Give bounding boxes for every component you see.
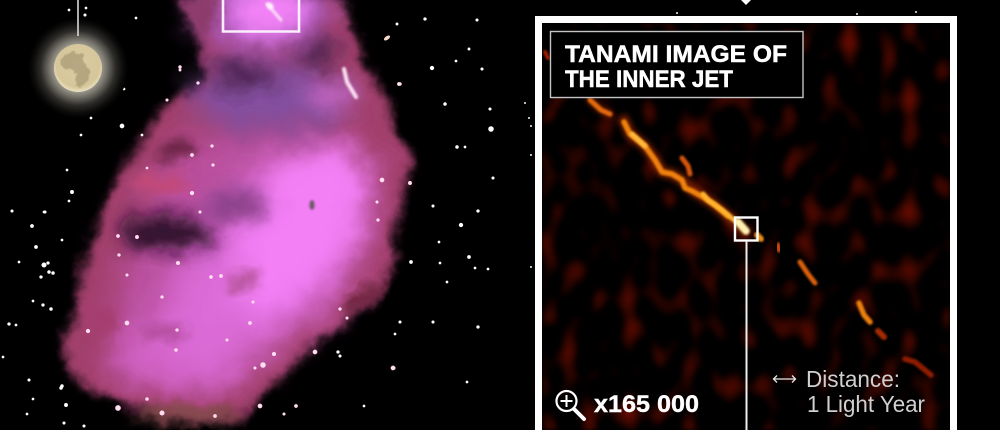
bright radio streak (344, 69, 356, 97)
zoom box on the lobe centre (223, 0, 299, 32)
connector arrowhead at top (741, 0, 751, 5)
white frame (538, 20, 954, 430)
pointer line to the moon (77, 0, 79, 36)
lower brown edge (136, 406, 240, 424)
distance label: 1 Light Year (807, 391, 925, 417)
moon for scale (28, 0, 128, 118)
small elongated source (383, 35, 391, 41)
title box (550, 32, 803, 98)
background noise (542, 23, 950, 430)
title box: THE INNER JET (565, 66, 733, 93)
upper purple bridge (192, 61, 348, 133)
stars over the nebula (86, 66, 412, 417)
radio lobe nebula (62, 0, 411, 424)
title box: TANAMI IMAGE OF (565, 41, 787, 68)
icon: distance arrow (774, 376, 796, 382)
central speck (309, 200, 315, 210)
top bright core (194, 0, 330, 51)
distance label: Distance: (806, 366, 900, 392)
icon: magnifier (556, 391, 584, 419)
dark patches (120, 215, 212, 251)
inner jet (545, 52, 931, 375)
distance label (806, 366, 925, 417)
panel: TANAMI image (538, 20, 954, 430)
magnification label: x165 000 (594, 391, 699, 418)
selection box and connector (735, 218, 758, 430)
